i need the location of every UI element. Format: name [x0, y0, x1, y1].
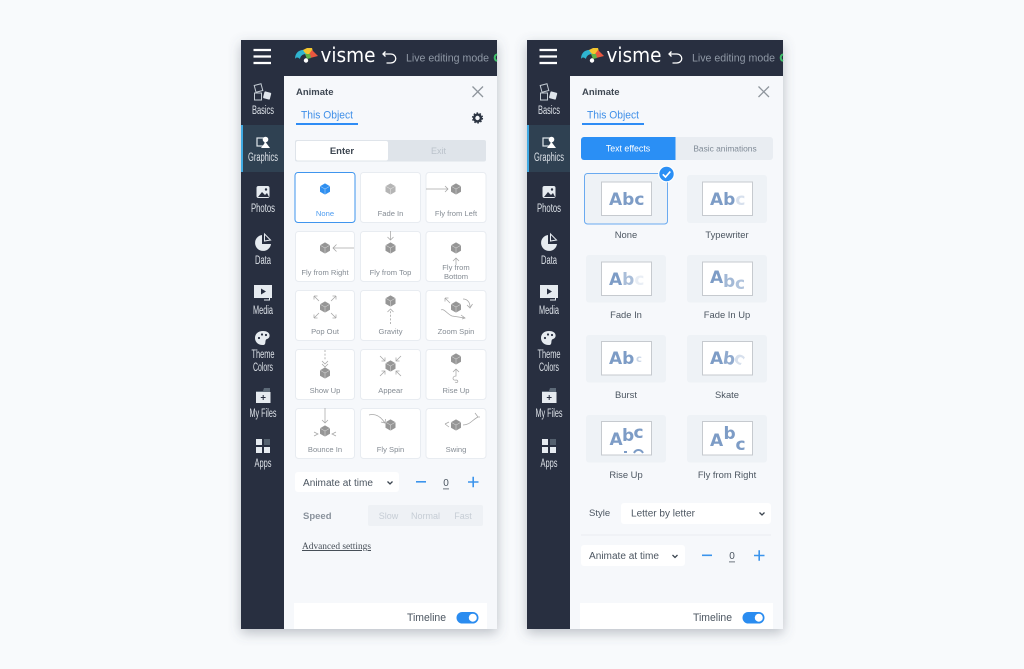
card: Bounce In: [296, 408, 354, 458]
effect: None: None: [615, 229, 637, 240]
card: Fly Spin: [360, 408, 420, 458]
control: style dropdown: Letter by letter: [631, 508, 696, 520]
card: Fly from Top: [360, 231, 420, 282]
effect: Fade In: Abc: [609, 270, 644, 290]
tabs: enter and exit: Exit: [431, 146, 446, 156]
card: Pop Out: Pop Out: [311, 327, 340, 336]
card: Zoom Spin: [426, 290, 486, 340]
effect: Fly from Right: b: [724, 424, 736, 444]
control: speed: Fast: [454, 511, 472, 521]
card: Swing: [426, 408, 486, 458]
card: Appear: [360, 350, 420, 400]
effect: Fade In Up: c: [735, 274, 745, 294]
effect: Burst: Ab: [609, 349, 634, 369]
tabs: enter and exit: [295, 140, 486, 162]
effect: Rise Up: A: [610, 430, 624, 450]
effect: Typewriter: Abc: [710, 190, 745, 210]
tabs: enter and exit: Enter: [330, 146, 354, 157]
effect: Fade In Up: A: [710, 268, 724, 288]
footer: timeline toggle: Timeline: [407, 612, 446, 624]
control: speed: [303, 505, 483, 526]
card: Show Up: [296, 350, 354, 400]
card: Pop Out: [296, 290, 354, 340]
effect: Fly from Right: A: [710, 431, 724, 451]
card: Fly from Top: Fly from Top: [370, 268, 411, 277]
effect: Fade In Up: [687, 255, 767, 320]
control: animate at time: 0: [443, 478, 449, 489]
effect: Fade In Up: b: [723, 272, 735, 292]
card: Fly Spin: Fly Spin: [377, 445, 404, 454]
card: Fly from Left: Fly from Left: [435, 209, 478, 218]
tabs: text effects and basic animations: [581, 137, 773, 160]
icon: selected check: [659, 166, 674, 182]
effect: Fade In Up: Fade In Up: [704, 309, 750, 320]
control: animate at time: Animate at time: [589, 551, 659, 562]
effect: Burst: Burst: [615, 389, 637, 400]
card: Show Up: Show Up: [310, 386, 340, 395]
effect: Skate: [687, 335, 767, 400]
control: animate at time: [295, 472, 478, 492]
effect: Fly from Right: [687, 415, 767, 480]
card: Fly from Bottom: Fly from: [442, 263, 470, 272]
card: Gravity: Gravity: [378, 327, 403, 336]
link: advanced settings: Advanced settings: [302, 541, 371, 552]
control: animate at time: Animate at time: [303, 478, 373, 489]
effect: None: [584, 166, 674, 240]
control: style dropdown: [581, 503, 771, 536]
footer: timeline toggle: Timeline: [693, 612, 732, 624]
effect: None: Abc: [609, 190, 644, 210]
card: Swing: Swing: [446, 445, 466, 454]
control: speed: Speed: [303, 511, 332, 522]
card: Fly from Left: [426, 172, 486, 222]
effect: Skate: A: [710, 349, 724, 369]
effect: Fly from Right: c: [736, 435, 746, 455]
card: Fly from Right: Fly from Right: [301, 268, 350, 277]
card: Rise Up: [426, 350, 486, 400]
card: Bounce In: Bounce In: [308, 445, 342, 454]
control: speed: Slow: [379, 511, 399, 521]
card: None: None: [316, 209, 334, 218]
control: animate at time: [581, 545, 764, 566]
effect: Burst: [586, 335, 666, 400]
effect: Fade In: [586, 255, 666, 320]
effect: Burst: c: [636, 354, 642, 365]
effect: Fly from Right: Fly from Right: [698, 469, 757, 480]
card: None: [295, 172, 355, 222]
card: Rise Up: Rise Up: [442, 386, 470, 395]
effect: Typewriter: Typewriter: [705, 229, 749, 240]
card: Fly from Bottom: [426, 232, 486, 282]
panel: animate text effects: [527, 40, 783, 629]
control: animate at time: 0: [729, 551, 735, 562]
card: Fade In: [360, 172, 420, 222]
effect: Fade In: Fade In: [610, 309, 642, 320]
card: Gravity: [360, 290, 420, 340]
card: Fly from Bottom: Bottom: [444, 272, 468, 281]
control: style dropdown: Style: [589, 508, 610, 519]
effect: Rise Up: c: [634, 423, 644, 443]
footer: timeline toggle: [580, 603, 773, 629]
footer: timeline toggle: [294, 603, 487, 629]
effect: Rise Up: [586, 415, 666, 480]
card: Fade In: Fade In: [378, 209, 403, 218]
tabs: text effects and basic animations: Basic animations: [693, 144, 757, 154]
panel: animate object effects: [241, 40, 497, 629]
card: Fly from Right: [296, 232, 354, 282]
tabs: text effects and basic animations: Text effects: [606, 144, 651, 154]
card: Appear: Appear: [378, 386, 403, 395]
effect: Skate: c: [730, 348, 749, 370]
control: speed: Normal: [411, 511, 440, 521]
effect: Typewriter: [687, 175, 767, 240]
effect: Rise Up: b: [622, 426, 634, 446]
icon: settings gear: [472, 113, 482, 123]
effect: Skate: Skate: [715, 389, 739, 400]
effect: Rise Up: Rise Up: [609, 469, 643, 480]
effect: Skate: b: [722, 349, 736, 370]
card: Zoom Spin: Zoom Spin: [438, 327, 474, 336]
